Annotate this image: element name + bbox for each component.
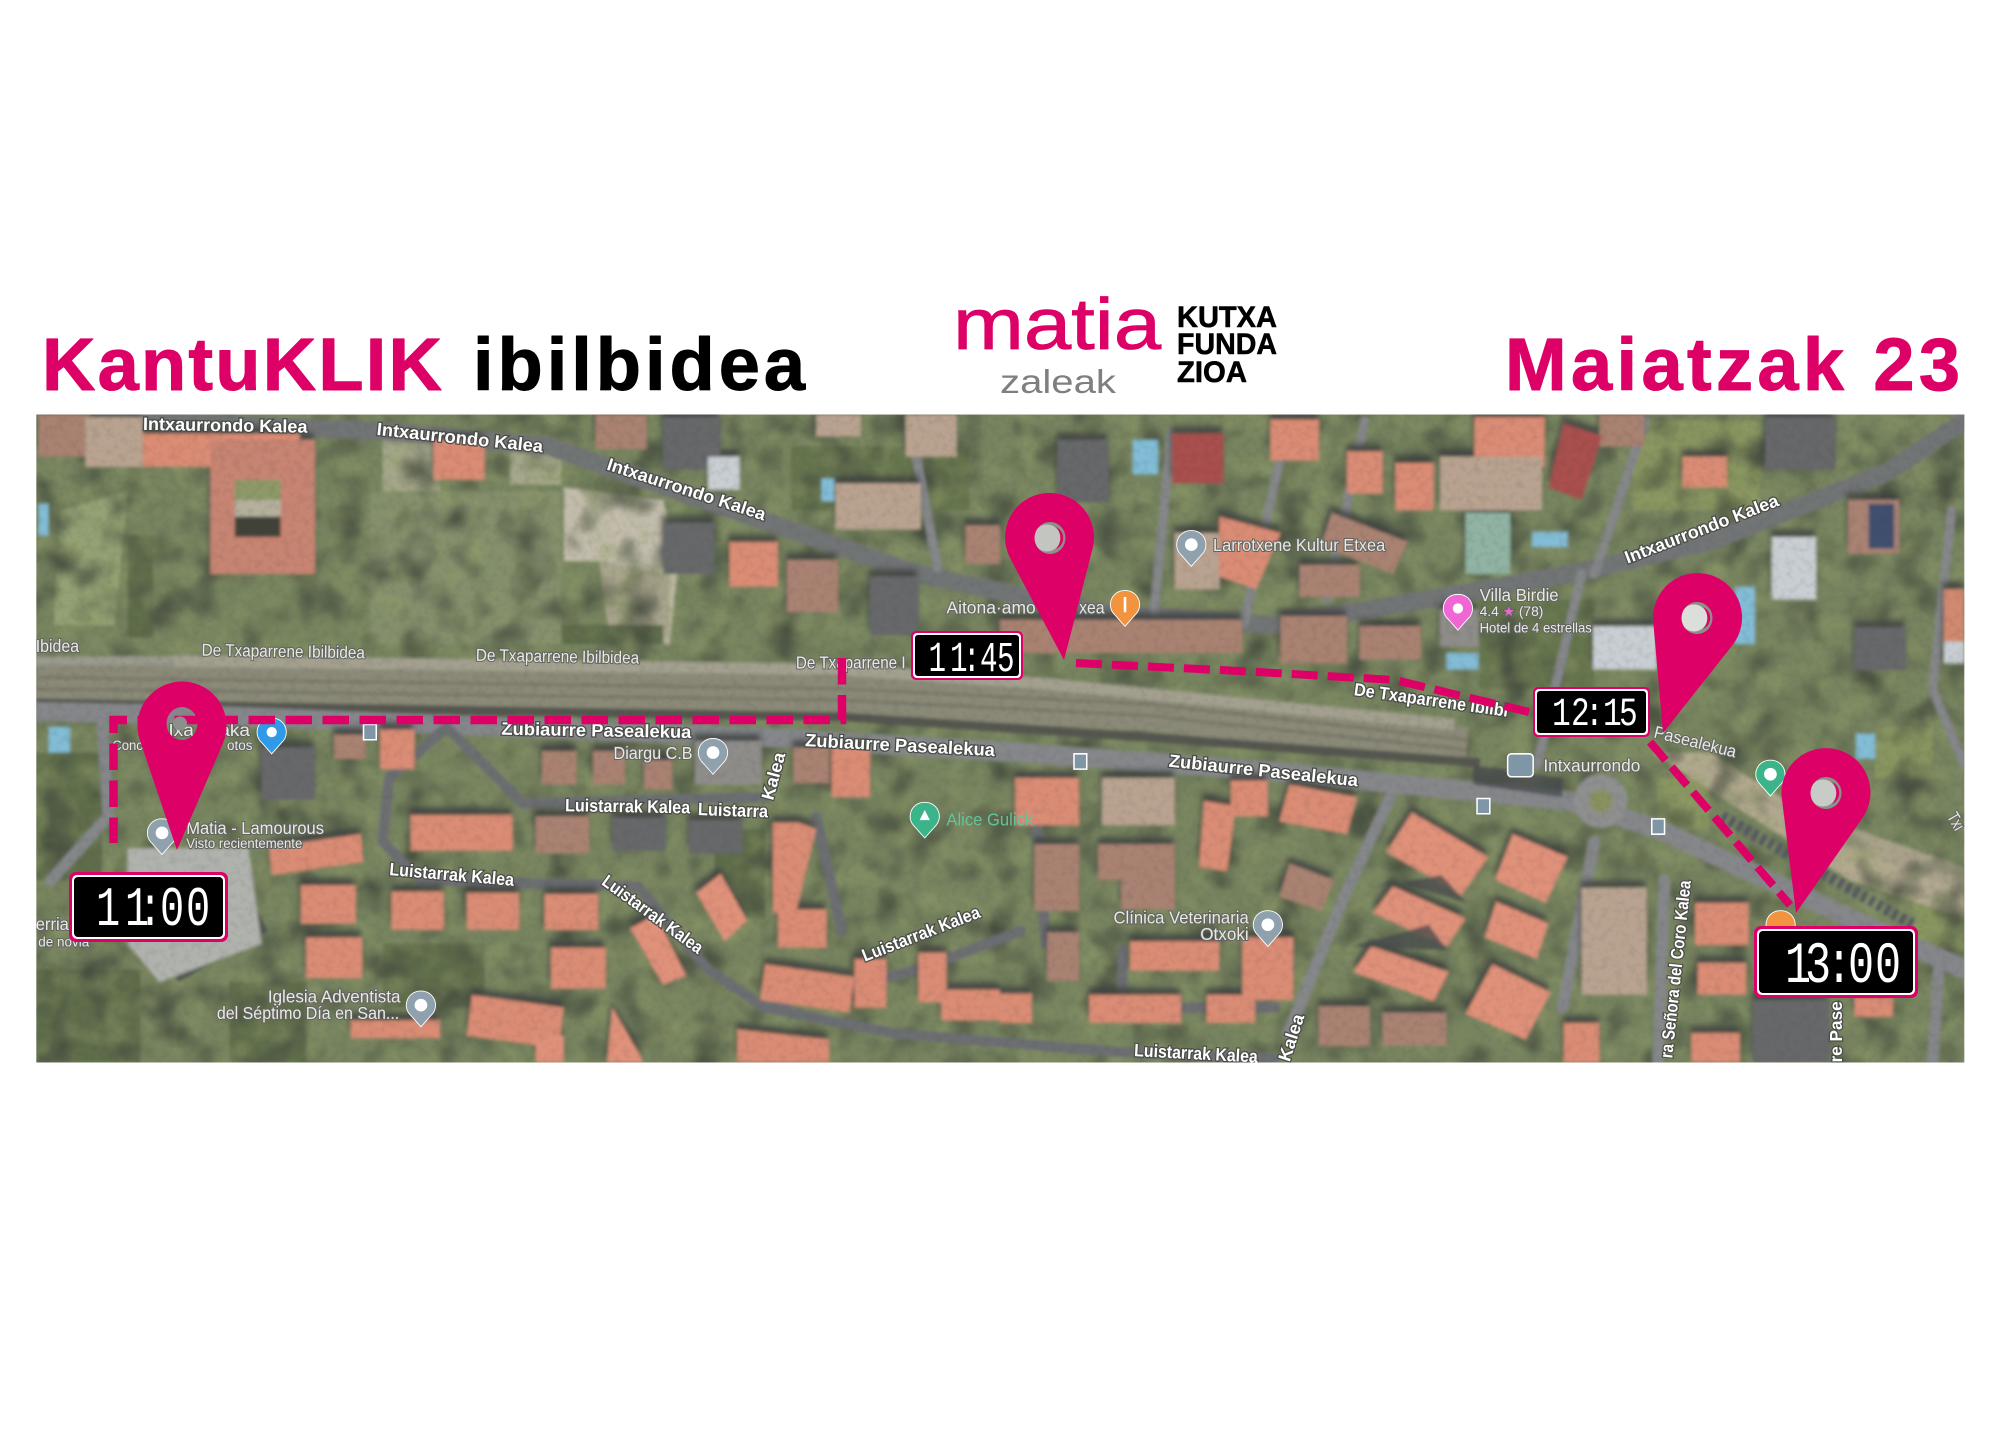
street labels: Kalea <box>758 749 790 802</box>
buildings <box>38 415 1964 1062</box>
roads <box>36 421 1964 1062</box>
place labels: Intxaurrondo <box>1543 756 1640 776</box>
place labels: Hotel de 4 estrellas <box>1480 621 1592 636</box>
clock: 11:45: 11:45 <box>928 636 1015 685</box>
place labels: del Séptimo Día en San... <box>217 1003 399 1023</box>
title: KantuKLIK ibilbidea: KantuKLIK <box>42 323 442 406</box>
clock: 13:00: 13:00 <box>1785 934 1901 1000</box>
street labels: Luistarrak Kalea <box>598 871 708 958</box>
solar panels <box>1869 504 1894 548</box>
foliage mottling <box>36 415 1966 1064</box>
street labels: ra Señora del Coro Kalea <box>1656 879 1695 1059</box>
place labels: 4.4 ★ (78) <box>1480 604 1543 619</box>
street labels: Luistarrak Kalea <box>1134 1040 1259 1067</box>
place labels: erria <box>36 914 69 934</box>
place labels: Matia - Lamourous <box>186 818 324 838</box>
place labels: Clínica Veterinaria <box>1114 907 1249 927</box>
place labels: Villa Birdie <box>1480 585 1559 605</box>
place labels: Conc <box>112 738 143 753</box>
street labels: Luistarrak Kalea <box>389 859 516 890</box>
clock: 11:00 <box>69 872 228 942</box>
logo: Kutxa Fundazioa <box>1177 301 1277 389</box>
clock: 12:15: 12:15 <box>1552 692 1638 737</box>
map: aerial view of the route <box>36 414 1969 1067</box>
place labels: Aitona·amo <box>946 598 1036 618</box>
logo: matia zaleak: matia <box>953 285 1162 365</box>
street labels <box>36 414 1969 1067</box>
ground: lawns and vegetation <box>36 421 1964 1062</box>
clock: 12:15 <box>1533 687 1650 737</box>
logo: Kutxa Fundazioa: ZIOA <box>1177 356 1247 389</box>
street labels: Zubiaurre Pasealekua <box>805 730 997 760</box>
street labels: re Pase <box>1826 1001 1846 1062</box>
pin: stop 1 <box>138 681 227 850</box>
title: KantuKLIK ibilbidea: ibilbidea <box>473 323 806 406</box>
swimming pools <box>38 440 1875 759</box>
Matia building <box>128 848 261 982</box>
street labels: Luistarrak Kalea <box>565 795 691 817</box>
street labels: Ibidea <box>36 636 79 656</box>
place labels: Iglesia Adventista <box>268 987 401 1007</box>
street labels: Zubiaurre Pasealekua <box>501 719 693 742</box>
street labels: Kalea <box>1274 1010 1309 1064</box>
place labels: Alice Gulick <box>946 809 1034 829</box>
street labels: Zubiaurre Pasealekua <box>1168 751 1360 791</box>
place labels: xea <box>1079 598 1105 618</box>
place labels: aka <box>219 720 250 740</box>
street labels: De Txaparrene I <box>796 652 906 672</box>
convent courtyard <box>235 480 281 537</box>
street labels: De Txaparrene Ibilbidea <box>201 640 365 662</box>
logo: Kutxa Fundazioa: KUTXA <box>1177 301 1277 334</box>
pin: stop 4 <box>1781 748 1870 913</box>
roundabout <box>1574 774 1628 828</box>
railway corridor <box>36 661 1480 763</box>
place labels: de novia <box>38 934 90 949</box>
pin: stop 3 <box>1653 573 1742 733</box>
logo: Kutxa Fundazioa: FUNDA <box>1177 328 1277 361</box>
place labels: Visto recientemente <box>186 836 302 851</box>
clock: 13:00 <box>1754 926 1918 1000</box>
street labels: De Txaparrene Ibilbidea <box>476 645 640 668</box>
title: KantuKLIK ibilbidea <box>42 323 806 406</box>
place labels: Ixa <box>168 720 194 740</box>
foliage highlights <box>36 415 1966 1064</box>
street labels: Pasealekua <box>1652 722 1739 762</box>
logo: matia zaleak <box>953 285 1162 400</box>
logo: matia zaleak: zaleak <box>1000 363 1117 400</box>
clock: 11:00: 11:00 <box>96 878 210 942</box>
place labels: Diargu C.B <box>614 743 693 763</box>
place labels <box>36 535 1640 1023</box>
place labels: otos <box>227 738 253 753</box>
street labels: Intxaurrondo Kalea <box>376 419 545 457</box>
date: Maiatzak 23: Maiatzak 23 <box>1505 323 1960 406</box>
street labels: Luistarra <box>698 799 769 822</box>
street labels: De Txaparrene Ibilbi <box>1353 679 1510 721</box>
street labels: Txi <box>1943 808 1969 834</box>
fine image texture <box>36 415 1966 1064</box>
clock: 11:45 <box>911 631 1023 685</box>
street labels: Intxaurrondo Kalea <box>143 414 309 437</box>
street labels: Intxaurrondo Kalea <box>1622 490 1782 568</box>
route: dashed line from Matia to Intxaurrondo <box>114 658 1790 905</box>
pin: stop 2 <box>1005 493 1094 660</box>
place labels: Otxoki <box>1200 924 1249 944</box>
street labels: Intxaurrondo Kalea <box>605 454 770 525</box>
shadows between building rows <box>166 765 1562 982</box>
place labels: Larrotxene Kultur Etxea <box>1213 535 1386 555</box>
map place markers <box>147 531 1795 1027</box>
street labels: Luistarrak Kalea <box>859 902 984 965</box>
car park <box>1722 816 1913 925</box>
